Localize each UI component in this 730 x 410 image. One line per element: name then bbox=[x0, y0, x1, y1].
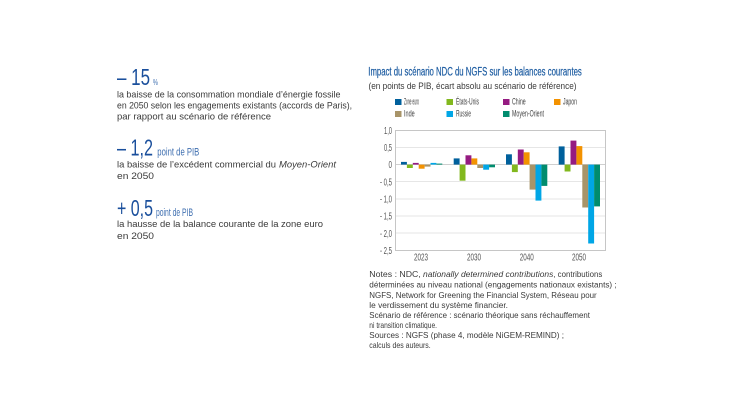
y axis labels: - 0,5 bbox=[380, 178, 392, 188]
figure description: la hausse de la balance courante de la zone euro bbox=[117, 219, 323, 229]
figure unit: % bbox=[153, 78, 158, 87]
notes and sources: déterminées au niveau national (engagements nationaux existants) ; bbox=[369, 279, 617, 289]
y axis labels: - 2,5 bbox=[380, 246, 392, 257]
legend: Japon bbox=[563, 97, 577, 107]
legend: Russie bbox=[456, 109, 471, 119]
x axis labels: 2040 bbox=[520, 252, 534, 263]
y axis labels: 1,0 bbox=[384, 126, 392, 137]
key figure: minus 15 percent bbox=[117, 64, 352, 121]
x axis labels: 2050 bbox=[572, 252, 586, 263]
figure description: en 2050 bbox=[117, 171, 154, 181]
chart subtitle: (en points de PIB, écart absolu au scénario de référence) bbox=[368, 81, 576, 91]
y axis labels: - 2,0 bbox=[380, 229, 392, 240]
bars 2023 bbox=[401, 162, 442, 169]
y axis labels: - 1,5 bbox=[380, 212, 392, 222]
figure value: – 15 bbox=[117, 64, 150, 90]
notes and sources: Scénario de référence : scénario théorique sans réchauffement bbox=[369, 310, 591, 320]
figure unit: point de PIB bbox=[156, 207, 193, 219]
notes and sources: calculs des auteurs. bbox=[369, 340, 431, 350]
bars 2040 bbox=[506, 150, 547, 201]
figure description: la baisse de la consommation mondiale d’énergie fossile bbox=[117, 89, 340, 99]
notes and sources: ni transition climatique. bbox=[369, 320, 437, 330]
bars 2030 bbox=[454, 155, 495, 181]
figure description: Moyen-Orient bbox=[279, 159, 336, 169]
y axis labels bbox=[380, 126, 392, 257]
notes and sources: le verdissement du système financier. bbox=[369, 300, 508, 310]
notes and sources: NGFS, Network for Greening the Financial System, Réseau pour bbox=[369, 290, 597, 300]
figure description bbox=[117, 89, 352, 121]
notes and sources: , contributions bbox=[553, 269, 602, 279]
key figure: plus 0.5 point of GDP bbox=[117, 195, 323, 241]
legend: Chine bbox=[512, 97, 526, 107]
bars 2050 bbox=[559, 141, 600, 244]
legend: Zone euro bbox=[404, 97, 419, 107]
bar chart bbox=[380, 126, 606, 263]
legend: États-Unis bbox=[456, 97, 479, 107]
notes and sources bbox=[369, 269, 617, 350]
figure description: en 2050 selon les engagements existants (accords de Paris), bbox=[117, 100, 352, 110]
y axis labels: - 1,0 bbox=[380, 194, 392, 206]
chart title: Impact du scénario NDC du NGFS sur les balances courantes bbox=[368, 66, 582, 78]
legend: Inde bbox=[404, 109, 415, 119]
x axis labels bbox=[414, 252, 586, 263]
figure description: en 2050 bbox=[117, 231, 154, 241]
key figure: minus 1.2 point of GDP bbox=[117, 134, 336, 181]
figure unit: point de PIB bbox=[157, 146, 199, 158]
figure value: + 0,5 bbox=[117, 195, 153, 221]
notes and sources: Sources : NGFS (phase 4, modèle NiGEM-REMIND) ; bbox=[369, 330, 564, 340]
y axis labels: 0,5 bbox=[384, 143, 392, 154]
x axis labels: 2030 bbox=[467, 252, 481, 263]
figure description bbox=[117, 219, 323, 241]
notes and sources: nationally determined contributions bbox=[423, 269, 554, 279]
y axis labels: 0 bbox=[388, 160, 392, 171]
x axis labels: 2023 bbox=[414, 252, 428, 263]
notes and sources: Notes : NDC, bbox=[369, 269, 421, 279]
figure value: – 1,2 bbox=[117, 134, 153, 160]
figure description: la baisse de l’excédent commercial du bbox=[117, 159, 276, 169]
figure description bbox=[117, 159, 336, 181]
legend: Moyen-Orient bbox=[512, 109, 544, 119]
figure description: par rapport au scénario de référence bbox=[117, 111, 271, 121]
legend bbox=[395, 97, 577, 119]
